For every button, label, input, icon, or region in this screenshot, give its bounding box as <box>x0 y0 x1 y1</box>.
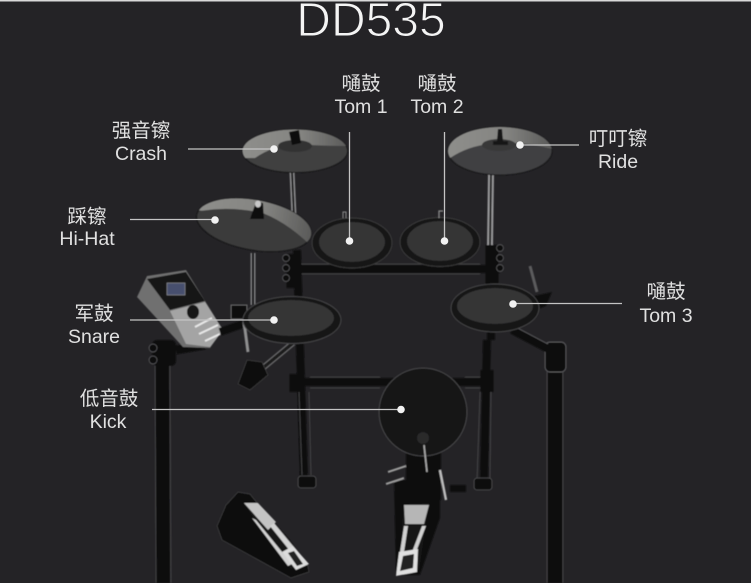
callout: crash: Crash <box>115 143 167 165</box>
callout: tom 1: Tom 1 <box>334 96 388 118</box>
crash cymbal <box>242 130 348 172</box>
callout: tom 3: 嗵鼓 <box>646 281 686 303</box>
callout: hi-hat <box>59 206 219 250</box>
sound module <box>137 270 243 348</box>
ride cymbal <box>448 127 552 175</box>
callout: crash <box>112 120 278 165</box>
tom 1 pad <box>312 212 392 268</box>
callout: ride: Ride <box>598 151 638 173</box>
kick pad <box>379 368 467 500</box>
kick pedal <box>386 466 466 576</box>
callout: kick <box>80 388 405 433</box>
hi-hat cymbal <box>196 198 312 252</box>
right leg <box>512 266 566 583</box>
callout: snare: 军鼓 <box>74 303 114 325</box>
callout: tom 1 <box>334 73 388 245</box>
callout: snare <box>68 303 278 348</box>
callout: tom 3: Tom 3 <box>639 305 693 327</box>
callout: tom 2 <box>410 73 464 245</box>
callout: tom 2: Tom 2 <box>410 96 464 118</box>
snare pad <box>243 296 341 344</box>
tom 2 pad <box>400 211 480 266</box>
drum kit illustration <box>137 127 566 583</box>
callout: tom 3 <box>509 281 693 327</box>
callout: hi-hat: Hi-Hat <box>59 228 115 250</box>
callout: tom 1: 嗵鼓 <box>341 73 381 95</box>
callout: kick: Kick <box>90 411 127 433</box>
callout: tom 2: 嗵鼓 <box>417 73 457 95</box>
cymbal stands <box>253 172 491 305</box>
callout: kick: 低音鼓 <box>80 388 138 410</box>
tom 3 pad <box>451 284 539 332</box>
callout: crash: 强音镲 <box>112 120 170 142</box>
callout: snare: Snare <box>68 326 120 348</box>
left leg <box>149 340 205 583</box>
callout: ride <box>516 128 647 173</box>
callout: hi-hat: 踩镲 <box>67 206 107 228</box>
callout: ride: 叮叮镲 <box>589 128 647 150</box>
snare stand <box>231 305 293 390</box>
rack frame <box>282 244 504 490</box>
hi-hat pedal <box>217 492 309 578</box>
